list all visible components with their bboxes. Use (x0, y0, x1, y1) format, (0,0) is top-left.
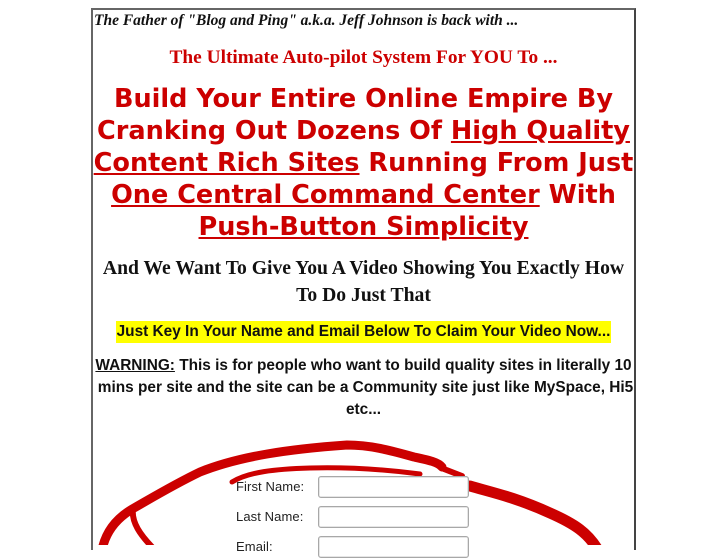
warning text: WARNING: This is for people who want to build quality sites in literally 10 (95, 357, 632, 374)
subtitle: The Ultimate Auto-pilot System For YOU To ... (170, 47, 557, 68)
main headline (94, 84, 633, 242)
secondary heading (103, 257, 624, 306)
main headline: Build Your Entire Online Empire By (114, 84, 613, 114)
field: email: Email: (236, 539, 273, 554)
page frame (91, 8, 636, 550)
warning text: etc... (346, 401, 381, 418)
secondary heading: And We Want To Give You A Video Showing You Exactly How (103, 257, 624, 279)
main headline: Content Rich Sites Running From Just (94, 148, 633, 178)
input: last name (318, 506, 469, 528)
input: first name (318, 476, 469, 498)
intro line: The Father of "Blog and Ping" a.k.a. Jeff Johnson is back with ... (94, 12, 518, 29)
main headline: Push-Button Simplicity (199, 212, 528, 242)
warning text (95, 357, 633, 418)
main headline: Cranking Out Dozens Of High Quality (97, 116, 630, 146)
warning text: mins per site and the site can be a Community site just like MySpace, Hi5 (98, 379, 633, 396)
main headline: One Central Command Center With (111, 180, 616, 210)
secondary heading: To Do Just That (296, 284, 431, 306)
highlighted call to action: Just Key In Your Name and Email Below To Claim Your Video Now... (117, 323, 610, 340)
field: last name: Last Name: (236, 509, 303, 524)
field: first name: First Name: (236, 479, 304, 494)
input: email (318, 536, 469, 558)
